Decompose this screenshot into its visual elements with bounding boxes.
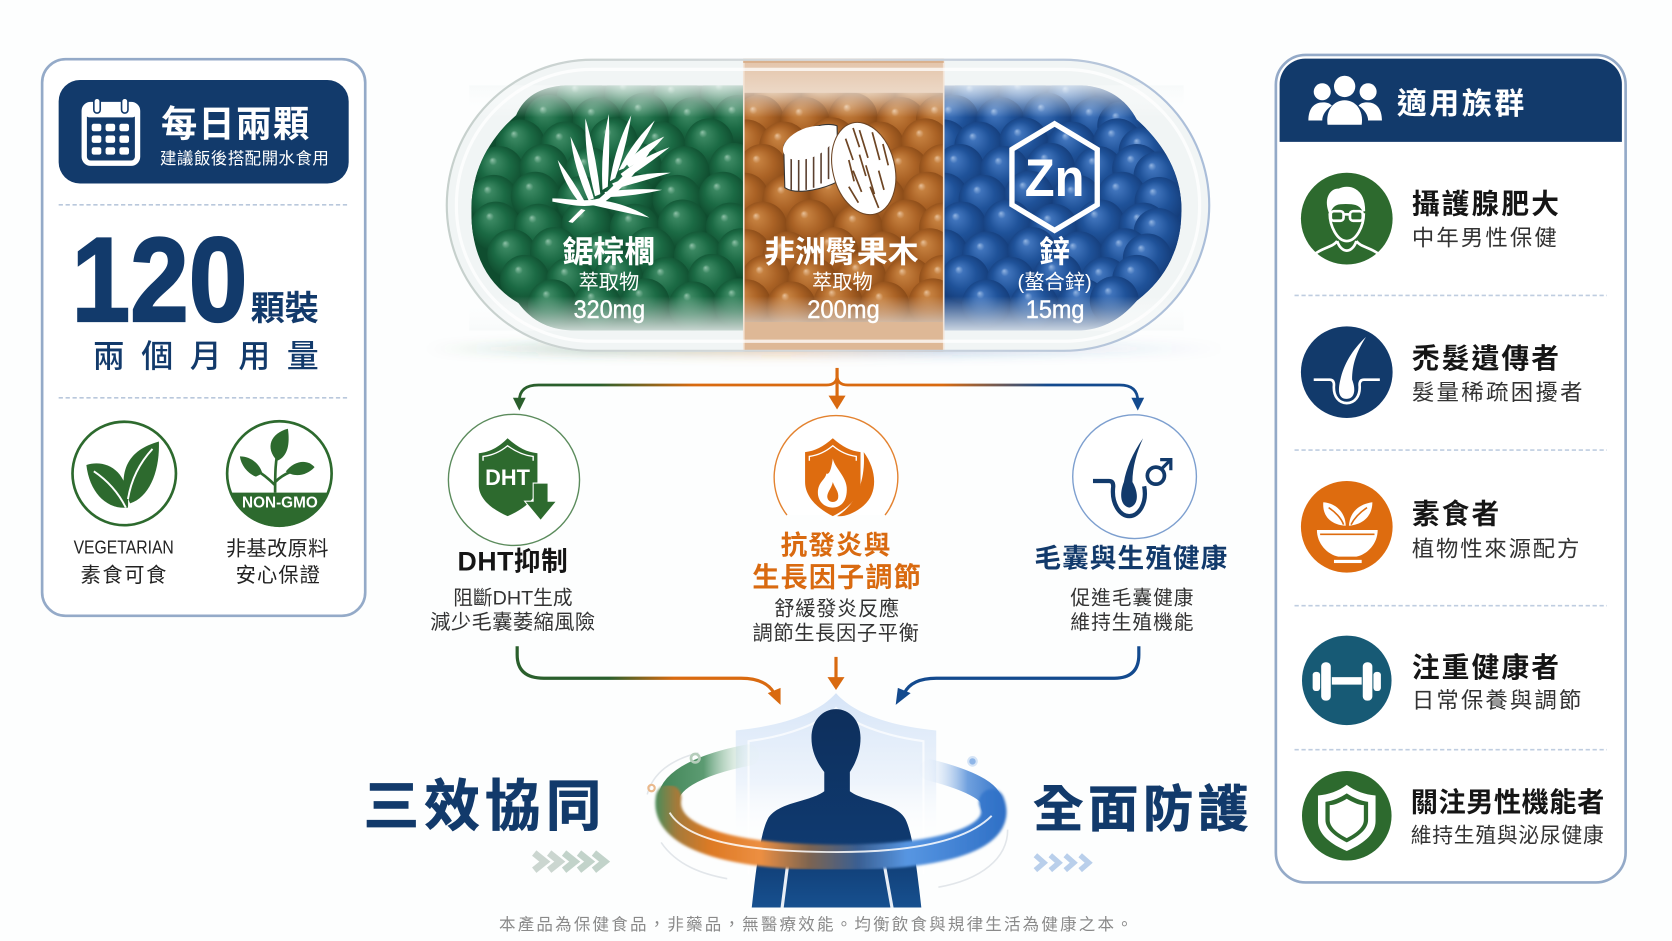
beads: green xyxy=(471,85,743,330)
badge: vegetarian: VEGETARIAN xyxy=(74,537,174,557)
group: vegetarians: 素食者 xyxy=(1412,499,1501,530)
header: suitable groups: 適用族群 xyxy=(1397,88,1527,121)
group: health-conscious xyxy=(1302,636,1583,725)
group: male function: 維持生殖與泌尿健康 xyxy=(1411,823,1605,847)
label: saw palmetto: 萃取物 xyxy=(578,271,639,294)
orbit lines xyxy=(647,753,1008,887)
icon: zinc hexagon: Zn xyxy=(1025,149,1084,208)
disclaimer: 本產品為保健食品，非藥品，無醫療效能。均衡飲食與規律生活為健康之本。 xyxy=(499,915,1135,934)
benefit: anti-inflammation: 抗發炎與 xyxy=(781,531,891,561)
band: orange capsule seam xyxy=(743,59,944,352)
benefit: anti-inflammation: 舒緩發炎反應 xyxy=(774,596,900,620)
group: enlarged prostate: 攝護腺肥大 xyxy=(1412,188,1561,219)
ring: back arcs xyxy=(668,755,992,806)
badge: non-GMO: 安心保證 xyxy=(236,564,321,587)
benefit: DHT inhibition xyxy=(430,414,596,634)
benefit: follicle and reproductive health: 促進毛囊健康 xyxy=(1070,588,1194,610)
benefit: follicle and reproductive health: 毛囊與生殖健康 xyxy=(1034,543,1228,573)
benefit: anti-inflammation: 生長因子調節 xyxy=(752,562,922,593)
label: pygeum: 萃取物 xyxy=(812,271,873,294)
benefit: anti-inflammation xyxy=(752,416,922,645)
group: hereditary hair loss: 禿髮遺傳者 xyxy=(1412,343,1561,374)
badge: non-GMO: 非基改原料 xyxy=(226,538,329,561)
icon: dumbbell xyxy=(1313,662,1381,701)
label: zinc: 15mg xyxy=(1026,297,1084,324)
capsule: three ingredients xyxy=(421,59,1232,355)
badge: vegetarian xyxy=(73,422,176,587)
label: zinc xyxy=(1017,234,1092,324)
group: health-conscious: 注重健康者 xyxy=(1412,652,1561,683)
icon: calendar xyxy=(84,98,138,163)
label: pygeum xyxy=(764,234,919,324)
panel: daily dosage xyxy=(42,59,365,616)
heading: synergy: 三效協同 xyxy=(364,775,607,837)
group: male function: 關注男性機能者 xyxy=(1411,787,1605,818)
icon: hair follicle and male symbol xyxy=(1093,438,1171,516)
label: saw palmetto: 320mg xyxy=(574,297,645,324)
heading: 每日兩顆: 每日兩顆 xyxy=(161,104,310,145)
group: health-conscious: 日常保養與調節 xyxy=(1412,688,1583,713)
label: pygeum: 200mg xyxy=(807,297,880,324)
benefit: DHT inhibition: 減少毛囊萎縮風險 xyxy=(430,611,596,634)
header: suitable groups xyxy=(1280,59,1622,142)
icon: flame shield xyxy=(805,438,874,516)
shield xyxy=(736,693,936,842)
icon: zinc hexagon xyxy=(1012,124,1097,230)
group: hereditary hair loss xyxy=(1301,326,1585,418)
benefit: DHT inhibition: 阻斷DHT生成 xyxy=(453,588,573,610)
icon: man with glasses xyxy=(1314,188,1380,255)
panel: suitable groups xyxy=(1276,55,1626,882)
label: zinc: (螯合鋅) xyxy=(1017,271,1092,294)
group: male function xyxy=(1302,771,1605,861)
group: enlarged prostate xyxy=(1301,173,1561,264)
silhouette xyxy=(752,709,921,907)
icon: DHT shield: DHT xyxy=(485,465,530,490)
group: vegetarians xyxy=(1301,481,1581,573)
label: pygeum: 非洲臀果木 xyxy=(764,234,919,269)
illustration: protected man with ring xyxy=(647,693,1008,907)
badge: non-GMO xyxy=(226,421,332,587)
arrows: capsule to benefits xyxy=(513,368,1144,411)
beads: blue xyxy=(944,85,1182,330)
label: saw palmetto xyxy=(563,234,655,324)
icon: palm leaf xyxy=(552,114,671,223)
icon: African cherry bark xyxy=(778,116,905,222)
ring: front arc xyxy=(668,798,994,857)
arrows: benefits to body xyxy=(517,646,1139,705)
chevrons: right xyxy=(1035,855,1089,870)
subheading: 建議飯後搭配開水食用 xyxy=(160,149,329,168)
badge: vegetarian: 素食可食 xyxy=(81,564,168,587)
benefit: DHT inhibition: DHT抑制 xyxy=(458,547,568,577)
label: saw palmetto: 鋸棕櫚 xyxy=(563,234,655,269)
text: two-month supply: 兩個月用量 xyxy=(93,338,335,374)
group: enlarged prostate: 中年男性保健 xyxy=(1412,225,1559,250)
benefit: follicle and reproductive health: 維持生殖機能 xyxy=(1070,612,1194,634)
badge: non-GMO: NON-GMO xyxy=(242,495,318,512)
stat: 120 capsules: 顆裝 xyxy=(251,290,319,328)
group: hereditary hair loss: 髮量稀疏困擾者 xyxy=(1412,380,1585,405)
icon: hair follicle xyxy=(1314,337,1380,403)
heading: full protection: 全面防護 xyxy=(1033,781,1253,837)
label: zinc: 鋅 xyxy=(1039,234,1070,269)
header: daily two capsules xyxy=(59,80,349,183)
benefit: follicle and reproductive health xyxy=(1034,415,1228,634)
icon: people xyxy=(1308,76,1382,125)
icon: DHT shield xyxy=(479,438,557,520)
group: vegetarians: 植物性來源配方 xyxy=(1412,537,1581,562)
stat: 120 capsules: 120 xyxy=(71,214,247,347)
icon: shield xyxy=(1318,785,1376,851)
icon: bowl with leaves xyxy=(1317,502,1378,563)
beads: orange xyxy=(744,92,943,322)
chevrons: left xyxy=(534,853,605,870)
benefit: anti-inflammation: 調節生長因子平衡 xyxy=(752,622,920,645)
